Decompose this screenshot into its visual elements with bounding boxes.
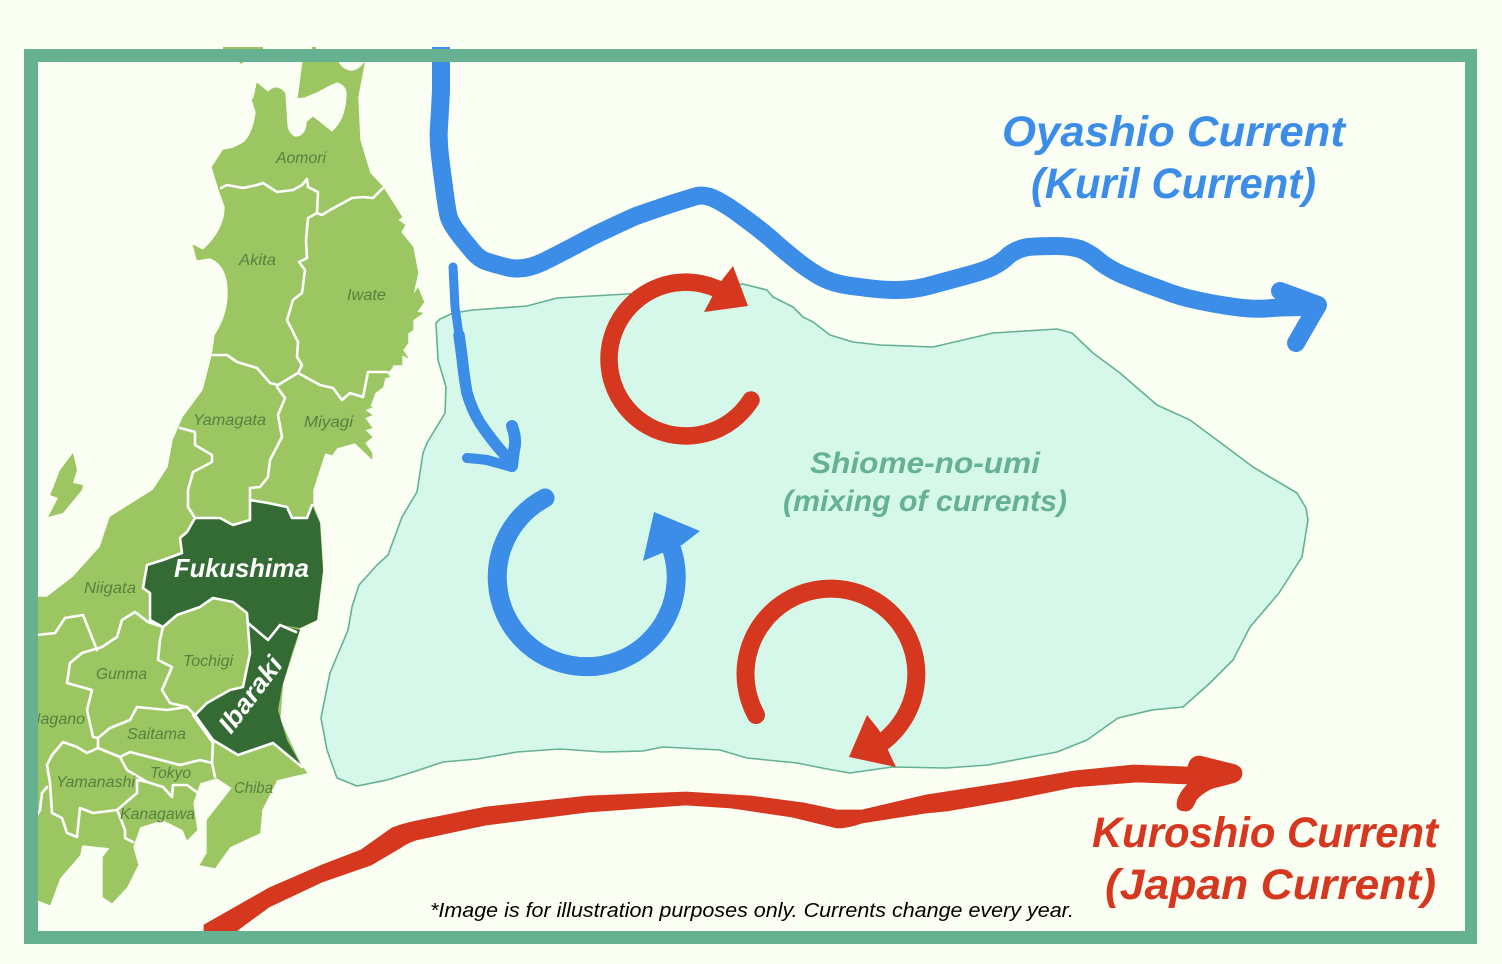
arrow: Oyashio branch current [453, 267, 515, 467]
map of northeastern Japan [29, 47, 424, 905]
land: Honshu [37, 60, 424, 905]
label: Chiba: Chiba [234, 780, 273, 797]
heading: Kuroshio Current: Kuroshio Current [1092, 809, 1440, 857]
eddy: red top [609, 266, 751, 436]
label: Shiome-no-umi: (mixing of currents) [783, 485, 1067, 518]
label: Shiome-no-umi: Shiome-no-umi [810, 447, 1041, 480]
label: Ibaraki: Ibaraki [212, 650, 289, 739]
land: Sado Island [48, 453, 83, 517]
prefecture: Fukushima [143, 500, 323, 640]
label: Gunma: Gunma [96, 666, 147, 683]
label: Fukushima: Fukushima [174, 553, 309, 583]
label: Aomori: Aomori [275, 150, 326, 167]
heading: Oyashio Current [1002, 108, 1347, 208]
label: Kanagawa: Kanagawa [120, 806, 195, 823]
label: Miyagi: Miyagi [304, 414, 353, 431]
land: Hokkaido edge above frame [223, 47, 316, 64]
eddy: blue [497, 498, 700, 667]
label: Saitama: Saitama [127, 726, 186, 743]
label: Tochigi: Tochigi [183, 653, 233, 670]
heading: Kuroshio Current [1092, 809, 1440, 909]
heading: Oyashio Current: (Kuril Current) [1031, 160, 1316, 208]
prefecture: Ibaraki [195, 625, 302, 767]
eddy: red bottom [746, 589, 916, 767]
region: Shiome-no-umi mixing zone [321, 284, 1308, 786]
footnote: *Image is for illustration purposes only. Currents change every year. [430, 900, 1074, 922]
prefecture borders [37, 179, 387, 842]
arrow: Oyashio main current [439, 40, 1318, 343]
label: Yamagata: Yamagata [193, 412, 266, 429]
label: Shiome-no-umi [783, 447, 1067, 518]
heading: Oyashio Current: Oyashio Current [1002, 108, 1347, 156]
heading: Kuroshio Current: (Japan Current) [1105, 861, 1436, 909]
label: Akita: Akita [238, 252, 276, 269]
label: Yamanashi: Yamanashi [56, 774, 135, 791]
label: Nagano: Nagano [29, 711, 85, 728]
label: Tokyo: Tokyo [150, 765, 191, 782]
arrow: Kuroshio current [204, 756, 1242, 940]
label: Niigata: Niigata [84, 580, 136, 597]
label: Iwate: Iwate [347, 287, 386, 304]
